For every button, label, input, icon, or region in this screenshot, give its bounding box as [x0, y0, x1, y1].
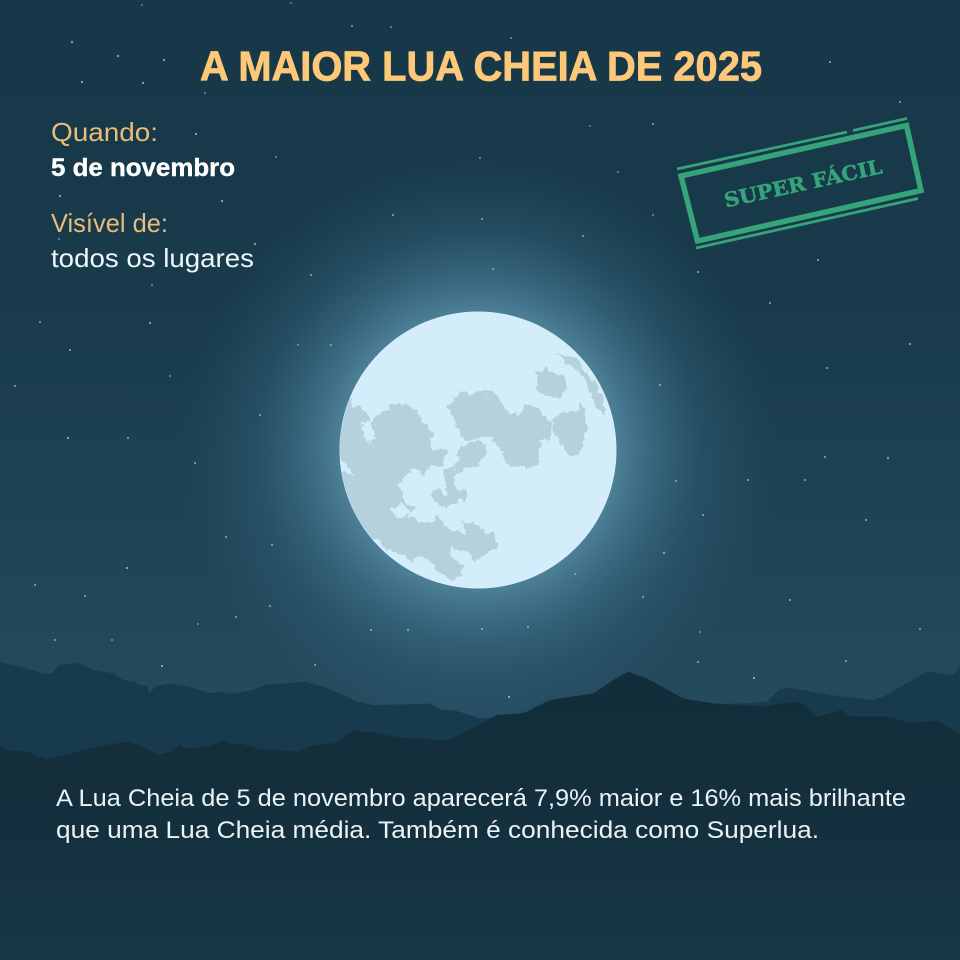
- description paragraph: [56, 785, 906, 844]
- moon: [330, 312, 616, 588]
- back mountain range: [0, 662, 960, 783]
- front mountain range and ground: [0, 672, 960, 960]
- label: Quando: Quando:: [51, 117, 158, 147]
- stamp: super fácil: [677, 118, 921, 248]
- moon glow: [170, 140, 790, 760]
- label: Visível de: Visível de:: [51, 208, 168, 238]
- description line 2: que uma Lua Cheia média. Também é conhecida como Superlua.: [56, 817, 819, 844]
- stamp frame: [681, 126, 921, 241]
- moon maria: [330, 353, 605, 580]
- stamp top rule left: [677, 132, 847, 169]
- stamp bottom rule: [696, 198, 918, 248]
- stars: [14, 2, 921, 698]
- title: A MAIOR LUA CHEIA DE 2025: [200, 42, 762, 90]
- stamp text: SUPER FÁCIL: [722, 154, 884, 212]
- date: 5 de novembro: 5 de novembro: [51, 154, 235, 182]
- location: todos os lugares: todos os lugares: [51, 243, 254, 273]
- moon disc: [340, 312, 616, 588]
- description line 1: A Lua Cheia de 5 de novembro aparecerá 7,9% maior e 16% mais brilhante: [56, 785, 906, 812]
- stamp top rule right: [853, 118, 907, 130]
